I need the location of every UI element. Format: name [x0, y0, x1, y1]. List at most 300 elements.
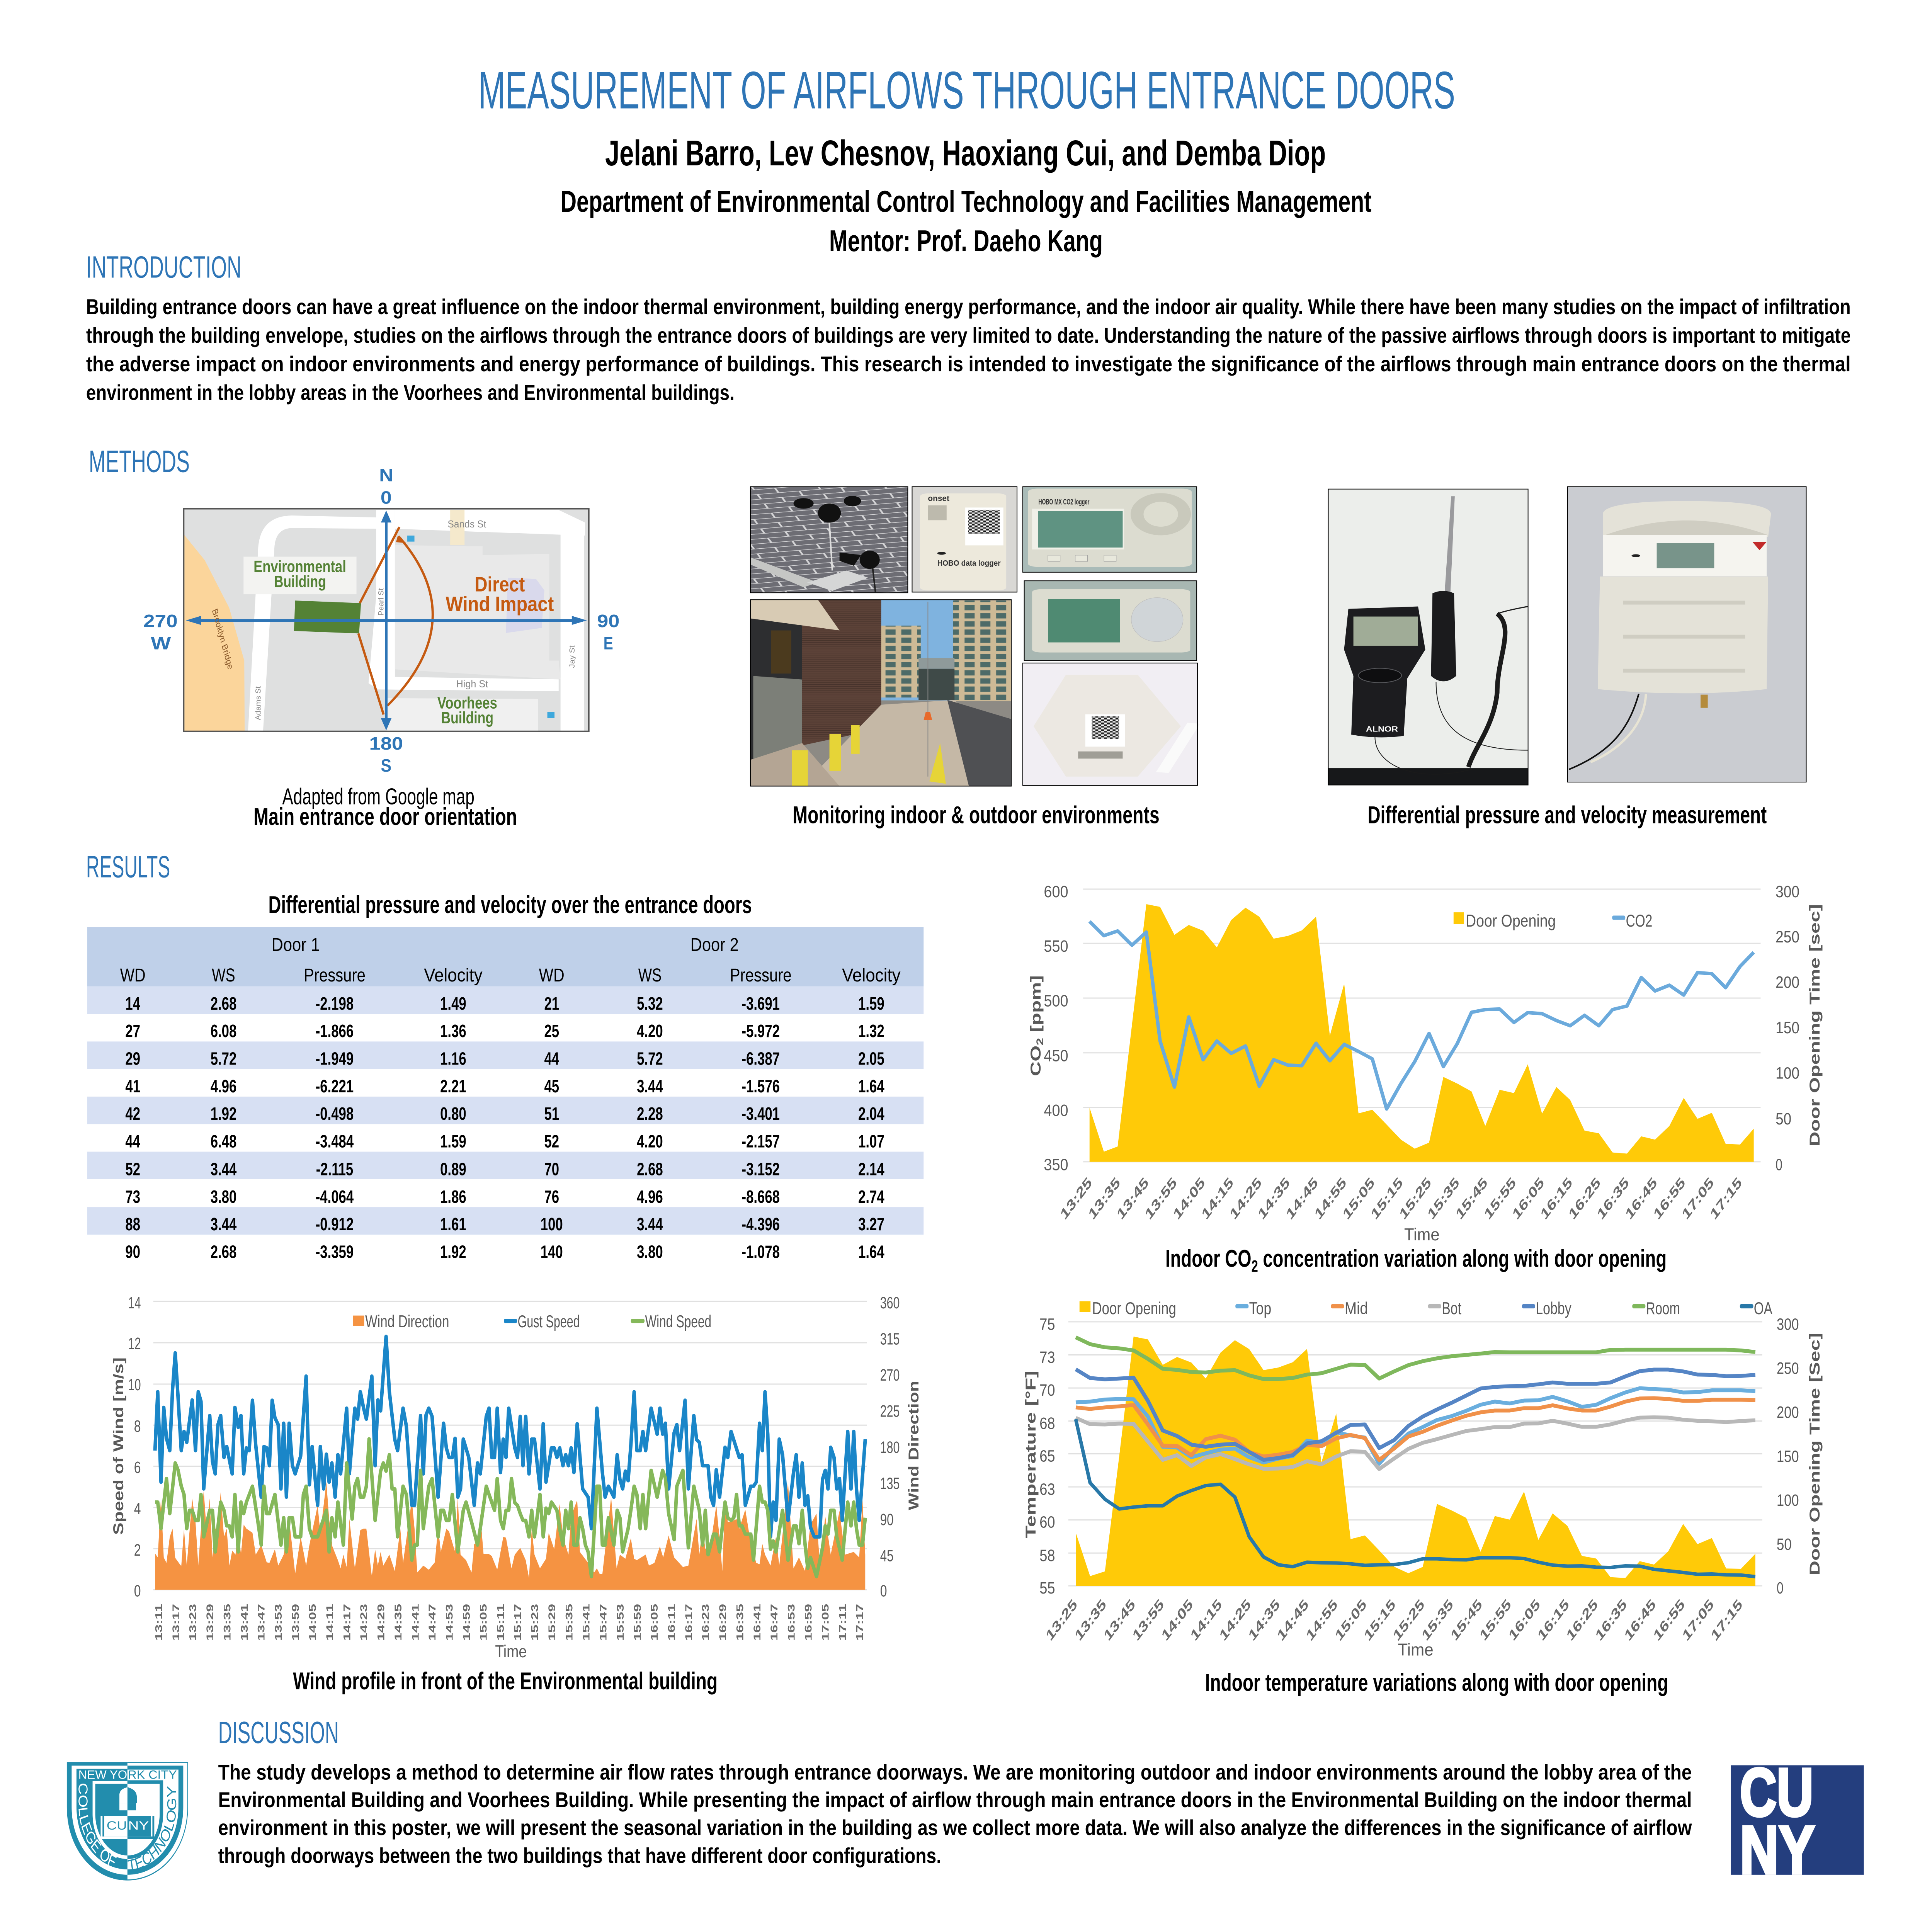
temperature chart time labels: 14:15: [1188, 1596, 1225, 1644]
temperature chart time labels: 13:25: [1044, 1596, 1080, 1644]
CO2 chart right axis: 0: [1776, 1155, 1782, 1174]
temperature chart time labels: 13:55: [1130, 1596, 1167, 1644]
chart: CO2 concentration: [1028, 883, 1823, 1244]
temperature chart legend: [1080, 1299, 1772, 1318]
table: door measurements: -8.668: [742, 1187, 780, 1207]
table: door measurements: -6.387: [742, 1049, 780, 1069]
table: door measurements: 90: [125, 1242, 140, 1262]
wind chart right axis: Wind Direction: [906, 1381, 922, 1510]
panel: door orientation map: E: [604, 633, 613, 653]
temperature chart time labels: 14:55: [1304, 1596, 1340, 1644]
temperature chart left axis: [1023, 1315, 1055, 1597]
wind chart right axis: 135: [880, 1474, 900, 1493]
wind chart time labels: 15:35: [564, 1604, 575, 1641]
temperature chart time labels: 16:45: [1622, 1596, 1658, 1644]
temperature chart time labels: 13:45: [1102, 1596, 1138, 1644]
panel: door orientation map: High St: [456, 678, 488, 689]
panel: door orientation map: Wind Impact: [446, 593, 554, 616]
logo: CUNY: NY: [1740, 1812, 1815, 1888]
temperature chart left axis: 58: [1039, 1546, 1055, 1565]
bottom sensor line: [1076, 1417, 1755, 1469]
wind chart left axis: 2: [134, 1541, 141, 1559]
CO2 chart time labels: 17:05: [1680, 1174, 1716, 1223]
table: door measurements: 25: [544, 1021, 559, 1041]
table: door measurements: -4.064: [316, 1187, 354, 1207]
CO2 chart time labels: 17:15: [1708, 1174, 1745, 1223]
table: door measurements: 27: [125, 1021, 140, 1041]
table: door measurements: 100: [541, 1214, 563, 1234]
panel: monitoring and measurement photos: HOBO MX CO2 logger: [1039, 497, 1089, 506]
temperature chart left axis: 63: [1039, 1480, 1055, 1498]
temperature chart time labels: 15:15: [1362, 1596, 1398, 1644]
panel: door orientation map: Adams St: [253, 686, 262, 720]
temperature chart right axis: 0: [1777, 1579, 1784, 1597]
table: door measurements: -5.972: [742, 1021, 780, 1041]
photo: differential pressure transmitter: [1568, 487, 1806, 782]
table: door measurements: Pressure: [730, 965, 792, 986]
photo: street view with weather station: [750, 600, 1011, 786]
table: door measurements: 3.80: [637, 1242, 663, 1262]
chart: wind profile: [111, 1294, 922, 1661]
wind chart time labels: 14:17: [342, 1604, 352, 1641]
temperature chart time labels: 16:35: [1593, 1596, 1629, 1644]
table: door measurements: 2.68: [211, 1242, 236, 1262]
wind chart time labels: 13:41: [239, 1604, 250, 1641]
table: door measurements: -0.912: [316, 1214, 354, 1234]
wind chart time labels: 13:53: [273, 1604, 284, 1641]
CO2 chart time labels: 15:55: [1482, 1174, 1519, 1223]
wind chart right axis: 45: [880, 1546, 894, 1565]
caption: door orientation: Main entrance door orientation: [253, 803, 517, 830]
table: door measurements: WD: [120, 965, 146, 986]
wind chart right axis: 90: [880, 1510, 894, 1529]
temperature chart right axis: 150: [1777, 1447, 1799, 1465]
CO2 chart time labels: 13:55: [1143, 1174, 1179, 1223]
CO2 chart right axis: 50: [1776, 1110, 1791, 1128]
CO2 chart right axis: 100: [1776, 1064, 1799, 1082]
wind chart time labels: 16:41: [752, 1604, 763, 1641]
table: door measurements: -3.152: [742, 1159, 780, 1179]
CO2 chart time labels: 15:25: [1397, 1174, 1434, 1223]
CO2 chart legend: CO2: [1626, 912, 1652, 930]
table: door measurements: 2.21: [440, 1076, 466, 1096]
heading: discussion: DISCUSSION: [218, 1715, 339, 1750]
wind chart right axis: 225: [880, 1402, 900, 1420]
torch: [119, 1787, 137, 1810]
logo: New York City College of Technology: [67, 1762, 188, 1881]
table: door measurements: 3.44: [637, 1214, 663, 1234]
wind chart time labels: 17:17: [854, 1604, 865, 1641]
wind chart left axis: 10: [128, 1376, 141, 1394]
table: door measurements: 4.96: [637, 1187, 663, 1207]
table: door measurements: 1.59: [440, 1131, 466, 1151]
panel: door orientation map: Brooklyn Bridge: [210, 607, 235, 671]
caption: monitoring: Monitoring indoor & outdoor environments: [793, 801, 1160, 828]
discussion text: Environmental Building and Voorhees Building. While presenting the impact of airflow through main entrance doors in the Environmental Building on the indoor thermal: [218, 1788, 1692, 1812]
wind chart time labels: 16:11: [666, 1604, 677, 1641]
temperature chart left axis: 75: [1039, 1315, 1055, 1333]
panel: door orientation map: Pearl St: [377, 588, 385, 616]
logo: New York City College of Technology: TECHNOLOGY: [127, 1786, 179, 1876]
authors: Jelani Barro, Lev Chesnov, Haoxiang Cui, and Demba Diop: [605, 133, 1326, 173]
CO2 chart time labels: 16:45: [1623, 1174, 1660, 1223]
wind chart time labels: 13:29: [205, 1604, 216, 1641]
panel: monitoring and measurement photos: [750, 487, 1806, 786]
table: door measurements: 5.72: [637, 1049, 663, 1069]
wind chart right axis: 360: [880, 1294, 900, 1312]
CO2 chart time labels: 15:15: [1369, 1174, 1405, 1223]
table: door measurements: 4.20: [637, 1131, 663, 1151]
introduction text: through the building envelope, studies on the airflows through the entrance doors of buildings are very limited to date. Understanding the nature of the passive airflows through doors is important to mitigate: [86, 324, 1851, 347]
CO2 chart time labels: 13:45: [1115, 1174, 1151, 1223]
CO2 chart time labels: 16:15: [1538, 1174, 1575, 1223]
temperature chart time labels: 16:25: [1564, 1596, 1600, 1644]
temperature chart time labels: 15:45: [1449, 1596, 1485, 1644]
table: door measurements: Velocity: [424, 965, 483, 986]
temperature chart time labels: 15:35: [1420, 1596, 1456, 1644]
wind chart right axis: 0: [880, 1582, 887, 1600]
wind direction area: [155, 1482, 865, 1590]
wind chart left axis: 0: [134, 1582, 141, 1600]
CO2 chart time labels: 16:25: [1566, 1174, 1603, 1223]
temperature chart left axis: 55: [1039, 1579, 1055, 1597]
temperature chart left axis: 73: [1039, 1348, 1055, 1366]
photo: anemometer: [750, 487, 908, 593]
logo: New York City College of Technology: NY: [128, 1819, 149, 1832]
CO2 chart time labels: 15:05: [1340, 1174, 1377, 1223]
wind chart left axis: [111, 1294, 141, 1600]
table: door measurements: 2.28: [637, 1104, 663, 1124]
CO2 chart right axis: 250: [1776, 927, 1799, 946]
wind chart time labels: 16:35: [735, 1604, 746, 1641]
temperature chart right axis: 300: [1777, 1315, 1799, 1333]
table: door measurements: 5.32: [637, 993, 663, 1014]
heading: introduction: INTRODUCTION: [86, 250, 242, 284]
table: door measurements: 73: [125, 1187, 140, 1207]
table title: Differential pressure and velocity over the entrance doors: [268, 891, 752, 918]
photo: CO2 logger: [1023, 487, 1197, 572]
chart: indoor temperature: [1023, 1299, 1823, 1659]
temperature chart right axis: [1777, 1315, 1823, 1597]
wind chart time labels: 15:23: [529, 1604, 540, 1641]
table: door measurements: 6.48: [211, 1131, 236, 1151]
wind chart time labels: Time: [495, 1642, 527, 1661]
temperature chart left axis: Temperature [°F]: [1023, 1371, 1039, 1538]
wind chart time labels: 17:11: [837, 1604, 848, 1641]
panel: monitoring and measurement photos: ALNOR: [1366, 724, 1398, 733]
temperature chart right axis: 200: [1777, 1403, 1799, 1421]
heading: methods: METHODS: [89, 444, 190, 478]
table: door measurements: Door 2: [690, 934, 739, 955]
panel: monitoring and measurement photos: HOBO data logger: [937, 559, 1001, 567]
logo: New York City College of Technology: COLLEGE OF: [76, 1783, 118, 1872]
temperature chart left axis: 60: [1039, 1513, 1055, 1531]
logo: CUNY: CU: [1740, 1754, 1813, 1830]
wind chart time labels: 14:53: [444, 1604, 455, 1641]
table: door measurements: 1.92: [211, 1104, 236, 1124]
temperature chart time labels: Time: [1398, 1640, 1434, 1659]
panel: door orientation map: 180: [369, 733, 403, 753]
room line: [1076, 1337, 1755, 1379]
wind chart left axis: 6: [134, 1458, 141, 1476]
CO2 chart left axis: CO: [1028, 1047, 1044, 1076]
CO2 chart time labels: 14:55: [1312, 1174, 1349, 1223]
temperature chart time labels: [1044, 1596, 1745, 1659]
wind chart time labels: 17:05: [820, 1604, 831, 1641]
table: door measurements: 4.20: [637, 1021, 663, 1041]
wind chart legend: Gust Speed: [518, 1312, 580, 1331]
table: door measurements: 21: [544, 993, 559, 1014]
panel: door orientation map: 0: [381, 488, 392, 508]
CO2 chart time labels: 16:05: [1510, 1174, 1547, 1223]
temperature chart right axis: 250: [1777, 1359, 1799, 1378]
table: door measurements: -1.949: [316, 1049, 354, 1069]
wind chart time labels: 14:05: [307, 1604, 318, 1641]
title: MEASUREMENT OF AIRFLOWS THROUGH ENTRANCE DOORS: [478, 60, 1455, 120]
CO2 chart time labels: Time: [1404, 1225, 1440, 1244]
panel: door orientation map: N: [379, 465, 393, 485]
table: door measurements: 140: [541, 1242, 563, 1262]
wind chart legend: [353, 1312, 711, 1331]
introduction text: environment in the lobby areas in the Voorhees and Environmental buildings.: [86, 381, 735, 405]
table: door measurements: Pressure: [304, 965, 366, 986]
table: door measurements: 3.44: [211, 1159, 236, 1179]
panel: door orientation map: Environmental: [253, 557, 346, 576]
CO2 chart time labels: 13:25: [1058, 1174, 1095, 1223]
heading: results: RESULTS: [86, 849, 170, 884]
photo borders: [750, 487, 1806, 786]
logo: New York City College of Technology: NEW YO: [78, 1768, 127, 1781]
wind chart time labels: 13:47: [256, 1604, 267, 1641]
wind chart time labels: 16:47: [769, 1604, 780, 1641]
table: door measurements: -1.576: [742, 1076, 780, 1096]
CO2 chart legend: Door Opening: [1466, 912, 1556, 930]
panel: monitoring and measurement photos: onset: [928, 494, 949, 503]
table: door measurements: 52: [125, 1159, 140, 1179]
CO2 chart left axis: 450: [1044, 1046, 1068, 1065]
table: door measurements: 1.07: [858, 1131, 884, 1151]
temperature chart right axis: 100: [1777, 1491, 1799, 1509]
lobby line: [1076, 1369, 1755, 1460]
temperature chart time labels: 15:25: [1391, 1596, 1427, 1644]
wind chart right axis: [880, 1294, 922, 1600]
CO2 chart time labels: 14:45: [1284, 1174, 1320, 1223]
department: Department of Environmental Control Technology and Facilities Management: [561, 185, 1371, 218]
table: door measurements: 5.72: [211, 1049, 236, 1069]
CO2 chart time labels: 16:55: [1651, 1174, 1688, 1223]
temperature chart right axis: 50: [1777, 1535, 1792, 1553]
temperature chart time labels: 16:15: [1536, 1596, 1571, 1644]
mentor: Mentor: Prof. Daeho Kang: [829, 224, 1103, 258]
caption: temperature: Indoor temperature variations along with door opening: [1205, 1669, 1668, 1696]
table: door measurements: -4.396: [742, 1214, 780, 1234]
table: door measurements: 2.05: [858, 1049, 884, 1069]
caption: differential pressure: Differential pressure and velocity measurement: [1368, 801, 1767, 828]
wind chart time labels: 14:47: [427, 1604, 438, 1641]
wind chart time labels: 15:47: [598, 1604, 609, 1641]
temperature chart left axis: 68: [1039, 1414, 1055, 1432]
wind chart time labels: 15:29: [547, 1604, 558, 1641]
table: door measurements: Door 1: [272, 934, 320, 955]
temperature chart legend: Door Opening: [1092, 1299, 1176, 1318]
CO2 chart left axis: 350: [1044, 1155, 1068, 1174]
outdoor air line: [1076, 1419, 1755, 1577]
table: door measurements: [87, 927, 923, 1262]
table: door measurements: 1.36: [440, 1021, 466, 1041]
temperature chart time labels: 17:05: [1680, 1596, 1716, 1644]
introduction text: [86, 295, 1851, 405]
panel: door orientation map: Direct: [474, 573, 525, 596]
wind chart time labels: 14:35: [393, 1604, 404, 1641]
top sensor line: [1076, 1388, 1755, 1464]
panel: door orientation map: [143, 465, 619, 776]
caption: CO2: 2: [1252, 1257, 1258, 1276]
CO2 chart right axis: 200: [1776, 973, 1799, 992]
table: door measurements: 1.64: [858, 1242, 884, 1262]
wind chart time labels: 16:53: [786, 1604, 797, 1641]
table: door measurements: -1.078: [742, 1242, 780, 1262]
table: door measurements: 70: [544, 1159, 559, 1179]
table: door measurements: 0.89: [440, 1159, 466, 1179]
wind chart time labels: 16:59: [803, 1604, 814, 1641]
table: door measurements: -0.498: [316, 1104, 354, 1124]
table: door measurements: 52: [544, 1131, 559, 1151]
logo: New York City College of Technology: CU: [107, 1819, 127, 1832]
temperature chart time labels: 17:15: [1709, 1596, 1745, 1644]
wind speed line: [155, 1439, 865, 1577]
table: door measurements: Velocity: [842, 965, 901, 986]
table: door measurements: 51: [544, 1104, 559, 1124]
CO2 chart left axis: [1028, 883, 1068, 1174]
table: door measurements: -6.221: [316, 1076, 354, 1096]
wind chart time labels: 14:59: [461, 1604, 472, 1641]
table: door measurements: 1.59: [858, 993, 884, 1014]
table: door measurements: 2.74: [858, 1187, 884, 1207]
temperature chart time labels: 14:05: [1159, 1596, 1196, 1644]
table: door measurements: 1.64: [858, 1076, 884, 1096]
photo: velometer probe: [1328, 489, 1528, 785]
table: door measurements: 44: [125, 1131, 140, 1151]
table: door measurements: 4.96: [211, 1076, 236, 1096]
temperature chart legend: Bot: [1442, 1299, 1461, 1318]
table: door measurements: 6.08: [211, 1021, 236, 1041]
wind chart right axis: 180: [880, 1438, 900, 1456]
wind chart time labels: 14:29: [376, 1604, 386, 1641]
map source note: Adapted from Google map: [282, 784, 474, 810]
panel: door orientation map: S: [381, 755, 391, 776]
temperature chart time labels: 14:35: [1246, 1596, 1282, 1644]
temperature chart legend: Room: [1646, 1299, 1680, 1318]
discussion text: The study develops a method to determine air flow rates through entrance doorways. We are monitoring outdoor and indoor environments around the lobby area of the: [218, 1761, 1692, 1784]
wind chart time labels: 13:23: [188, 1604, 199, 1641]
wind chart time labels: 15:05: [478, 1604, 489, 1641]
door opening area: [1076, 1337, 1755, 1586]
table: door measurements: 2.04: [858, 1104, 884, 1124]
table: door measurements: -2.115: [316, 1159, 353, 1179]
table: door measurements: -2.157: [742, 1131, 780, 1151]
table: door measurements: 1.32: [858, 1021, 884, 1041]
table: door measurements: 2.14: [858, 1159, 884, 1179]
CO2 chart left axis: 600: [1044, 883, 1068, 901]
logo: CUNY: [1731, 1754, 1864, 1888]
table: door measurements: 1.16: [440, 1049, 466, 1069]
temperature chart right axis: Door Opening Time [Sec]: [1807, 1333, 1823, 1575]
table: door measurements: 42: [125, 1104, 140, 1124]
wind chart time labels: 14:11: [325, 1604, 335, 1641]
wind chart time labels: [153, 1604, 865, 1661]
CO2 chart right axis: 150: [1776, 1019, 1799, 1037]
CO2 chart time labels: 14:35: [1256, 1174, 1292, 1223]
gust speed line: [155, 1337, 865, 1537]
table: door measurements: 3.27: [858, 1214, 884, 1234]
wind chart time labels: 15:53: [615, 1604, 626, 1641]
CO2 chart left axis: [ppm]: [1028, 975, 1044, 1038]
wind chart time labels: 16:17: [684, 1604, 694, 1641]
table: door measurements: 2.68: [637, 1159, 663, 1179]
CO2 chart time labels: 16:35: [1595, 1174, 1631, 1223]
table: door measurements: 45: [544, 1076, 559, 1096]
wind chart time labels: 13:35: [222, 1604, 233, 1641]
discussion text: environment in this poster, we will present the seasonal variation in the building as we collect more data. We will also analyze the differences in the significance of airflow: [218, 1816, 1692, 1840]
table: door measurements: 41: [125, 1076, 140, 1096]
panel: door orientation map: 270: [143, 611, 178, 631]
wind chart left axis: 8: [134, 1417, 141, 1435]
table: door measurements: WS: [638, 965, 662, 986]
panel: door orientation map: Sands St: [447, 518, 486, 529]
table: door measurements: 29: [125, 1049, 140, 1069]
table: door measurements: 1.92: [440, 1242, 466, 1262]
wind chart legend: Wind Direction: [365, 1312, 449, 1331]
CO2 line: [1090, 922, 1754, 1109]
wind chart time labels: 15:11: [495, 1604, 506, 1641]
caption: CO2: Indoor CO: [1165, 1245, 1255, 1272]
discussion text: through doorways between the two buildings that have different door configurations.: [218, 1844, 941, 1868]
wind chart left axis: 4: [134, 1499, 141, 1518]
caption: wind profile: Wind profile in front of the Environmental building: [293, 1668, 718, 1695]
wind chart legend: Wind Speed: [645, 1312, 711, 1331]
temperature chart legend: Top: [1249, 1299, 1271, 1318]
wind chart left axis: Speed of Wind [m/s]: [111, 1357, 126, 1535]
introduction text: the adverse impact on indoor environments and energy performance of buildings. This research is intended to investigate the significance of the airflows through main entrance doors on the thermal: [86, 352, 1851, 376]
temperature chart time labels: 15:05: [1333, 1596, 1369, 1644]
wind chart left axis: 14: [128, 1294, 141, 1312]
table: door measurements: WS: [212, 965, 235, 986]
panel: door orientation map: Building: [441, 709, 493, 727]
wind chart time labels: 13:59: [291, 1604, 301, 1641]
photo: hexagonal data node: [1023, 663, 1200, 786]
discussion text: [218, 1761, 1692, 1868]
wind chart time labels: 14:23: [359, 1604, 369, 1641]
door opening area: [1090, 904, 1754, 1162]
table: door measurements: 44: [544, 1049, 559, 1069]
temperature chart legend: OA: [1754, 1299, 1772, 1318]
panel: door orientation map: Jay St: [568, 645, 576, 668]
wind chart left axis: 12: [128, 1334, 141, 1353]
table: door measurements: -3.359: [316, 1242, 354, 1262]
panel: door orientation map: 90: [597, 611, 619, 631]
caption: CO2: concentration variation along with door opening: [1258, 1245, 1667, 1272]
wind chart time labels: 16:05: [649, 1604, 660, 1641]
temperature chart time labels: 16:05: [1507, 1596, 1543, 1644]
CO2 chart time labels: 13:35: [1086, 1174, 1122, 1223]
CO2 chart time labels: 14:15: [1199, 1174, 1236, 1223]
wind chart right axis: 315: [880, 1330, 900, 1348]
photo: temperature logger: [912, 487, 1017, 592]
panel: door orientation map: W: [151, 633, 171, 653]
table: door measurements: -3.691: [742, 993, 780, 1014]
CO2 chart left axis: 550: [1044, 937, 1068, 955]
wind chart time labels: 15:41: [581, 1604, 592, 1641]
